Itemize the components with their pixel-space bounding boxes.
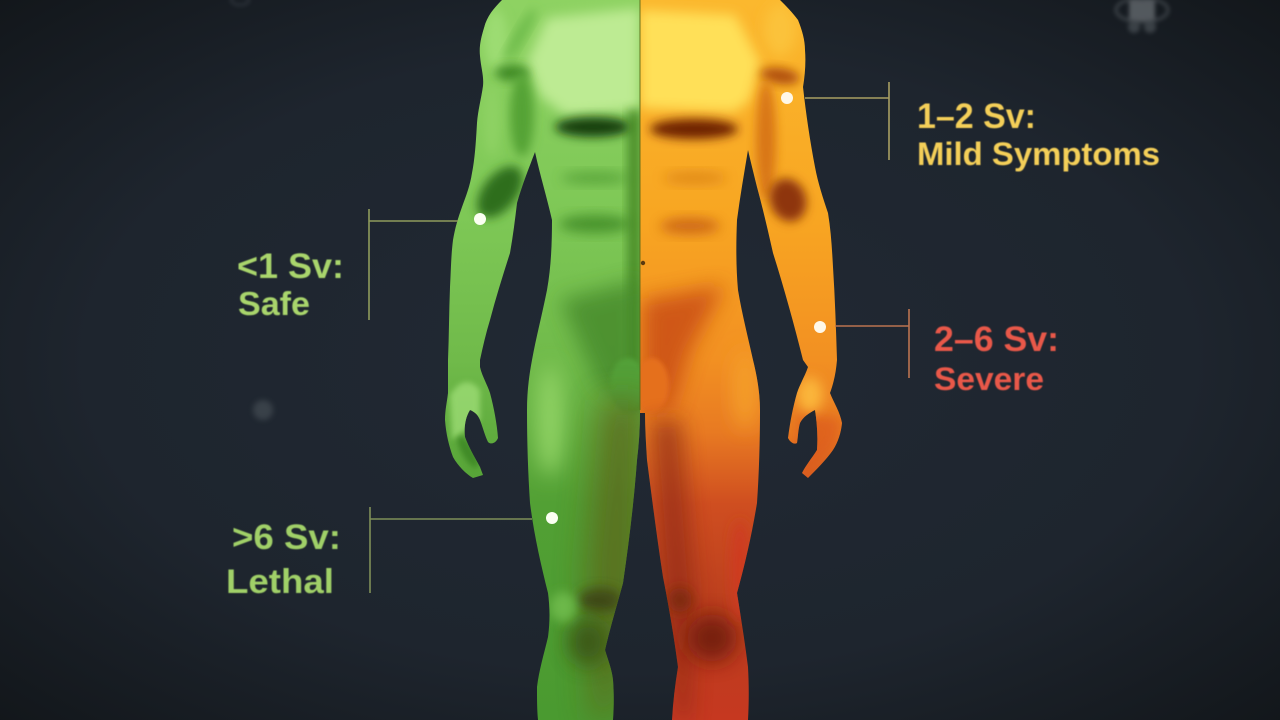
icon: faint atom symbol, top right	[1116, 0, 1168, 33]
body half: orange and red danger side	[635, 0, 850, 720]
dose label: 1–2 Sv:	[917, 97, 1036, 136]
effect label: Mild Symptoms	[917, 136, 1160, 172]
leader line	[369, 209, 458, 320]
dose label: >6 Sv:	[232, 518, 341, 557]
leader line	[835, 309, 909, 378]
marker dot	[474, 213, 486, 225]
navel mark	[641, 261, 645, 265]
callout: 1-2 Sv mild symptoms	[781, 82, 1160, 172]
callout: over 6 Sv lethal	[226, 507, 558, 601]
leader line	[805, 82, 889, 160]
leader line	[370, 507, 532, 593]
effect label: Safe	[238, 285, 310, 322]
marker dot	[814, 321, 826, 333]
callout: 2-6 Sv severe	[814, 309, 1059, 397]
marker dot	[781, 92, 793, 104]
figure: split human body	[440, 0, 850, 720]
dose label: 2–6 Sv:	[934, 320, 1059, 359]
center split line shadow	[639, 0, 641, 410]
icon: faint radiation mark, left	[253, 400, 273, 420]
body half: green safe side	[440, 0, 646, 720]
dose label: <1 Sv:	[237, 247, 344, 286]
callout: under 1 Sv safe	[237, 209, 486, 322]
effect label: Severe	[934, 361, 1044, 397]
icon: faint atom, top left	[231, 0, 249, 5]
marker dot	[546, 512, 558, 524]
effect label: Lethal	[226, 563, 334, 601]
